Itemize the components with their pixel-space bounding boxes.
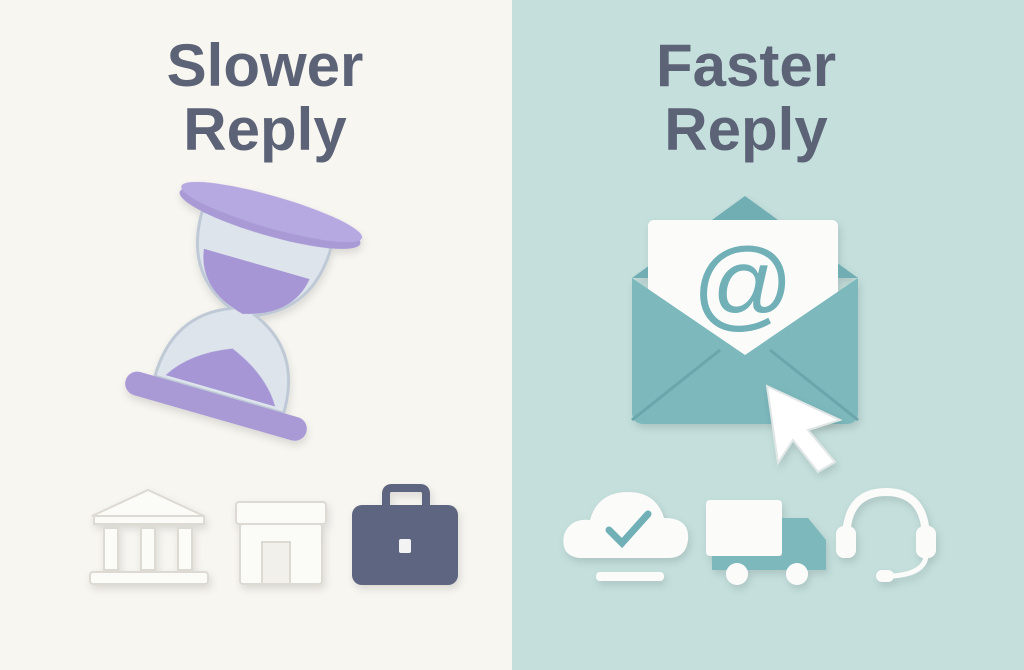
panel: faster bbox=[512, 0, 1024, 670]
title: faster reply bbox=[656, 32, 836, 163]
icon: briefcase bbox=[352, 488, 458, 585]
title: slower reply: Reply bbox=[183, 96, 347, 163]
title: faster reply: Faster bbox=[656, 32, 836, 99]
title: slower reply: Slower bbox=[167, 32, 363, 99]
icon: envelope with @ bbox=[632, 196, 858, 424]
icon: cursor bbox=[767, 386, 840, 472]
icon: truck bbox=[706, 500, 826, 585]
title: slower reply bbox=[167, 32, 363, 163]
icon: envelope with @: @ bbox=[692, 228, 794, 340]
icon: hourglass bbox=[122, 171, 366, 444]
title: faster reply: Reply bbox=[664, 96, 828, 163]
icon: bank bbox=[90, 490, 208, 584]
panel: slower bbox=[0, 0, 512, 670]
icon: headset bbox=[836, 492, 936, 582]
icon: store bbox=[236, 502, 326, 584]
icon: cloud check bbox=[563, 492, 688, 581]
